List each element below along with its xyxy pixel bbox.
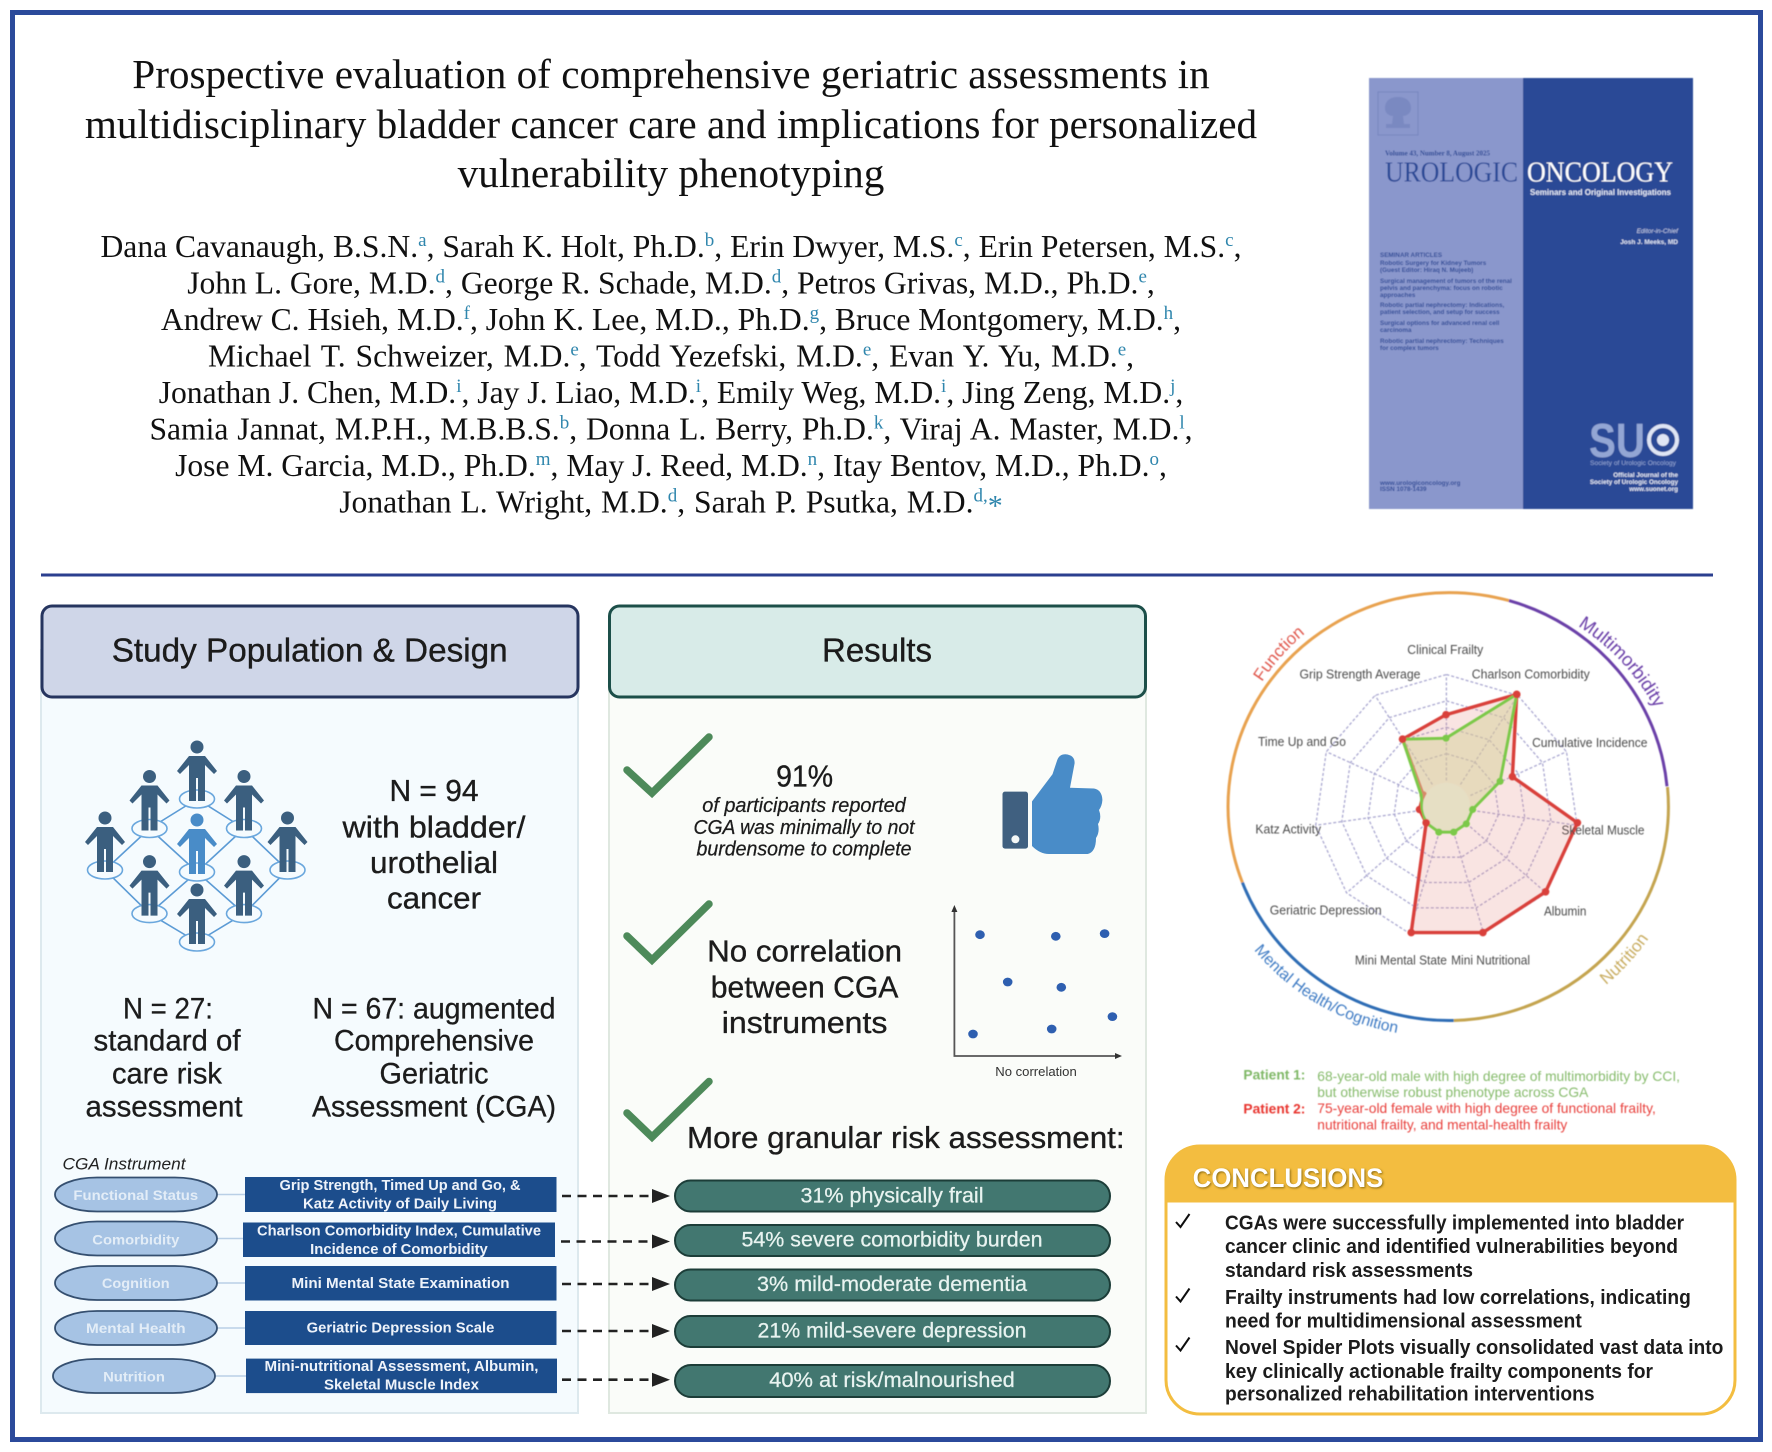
spider plot (1226, 590, 1671, 1034)
text: N = 94 (341, 773, 526, 916)
conclusion text: CGAs were successfully implemented into bladder (1225, 1212, 1684, 1234)
title (85, 51, 1258, 196)
conclusion text (1225, 1212, 1723, 1406)
journal cover: ONCOLOGY (1527, 157, 1673, 189)
authors: , Donna L. Berry, Ph.D. (569, 412, 874, 446)
CGA instrument rows: Incidence of Comorbidity (310, 1242, 488, 1258)
journal cover: carcinoma (1380, 327, 1412, 334)
journal cover: Robotic partial nephrectomy: Indications, (1380, 302, 1504, 309)
CGA instrument rows: Geriatric Depression Scale (307, 1321, 494, 1337)
axis labels: Skeletal Muscle (1562, 822, 1644, 838)
journal cover: Editor-in-Chief (1637, 228, 1679, 235)
icon: check mark 1 (627, 737, 709, 793)
axis labels: Time Up and Go (1258, 734, 1346, 749)
journal cover: Seminars and Original Investigations (1530, 187, 1671, 197)
conclusion text: cancer clinic and identified vulnerabilities beyond (1225, 1235, 1678, 1258)
conclusions header band: CONCLUSIONS (1193, 1163, 1383, 1193)
authors: , Bruce Montgomery, M.D. (819, 302, 1164, 337)
icon: patient network (85, 740, 308, 951)
authors: f (464, 303, 471, 324)
text: no correlation: between CGA (711, 970, 899, 1004)
journal cover: pelvis and parenchyma: focus on robotic (1380, 285, 1503, 292)
journal cover (1369, 78, 1693, 509)
category labels: Nutrition (1599, 934, 1648, 985)
patient legend: nutritional frailty, and mental-health frailty (1317, 1118, 1567, 1132)
result pills: 3% mild-moderate dementia (757, 1273, 1027, 1296)
authors: e (863, 340, 871, 360)
authors: j (1169, 376, 1175, 397)
CGA instrument rows: Mental Health (86, 1320, 186, 1336)
authors: i (456, 376, 461, 397)
text: no correlation: No correlation (707, 934, 902, 968)
authors: John L. Gore, M.D. (187, 266, 436, 300)
authors: Jonathan L. Wright, M.D. (339, 484, 668, 520)
title: vulnerability phenotyping (458, 150, 884, 196)
result pills: 31% physically frail (800, 1184, 984, 1208)
conclusion text: Novel Spider Plots visually consolidated vast data into (1225, 1336, 1723, 1359)
category labels: Mental Health/Cognition (1254, 943, 1398, 1034)
category ring arcs (1228, 593, 1668, 1021)
authors: m (536, 449, 551, 470)
authors: a (418, 230, 427, 251)
result pills: 40% at risk/malnourished (769, 1369, 1015, 1392)
journal cover: Robotic Surgery for Kidney Tumors (1380, 260, 1487, 267)
authors: d (668, 486, 678, 506)
conclusion text: key clinically actionable frailty components for (1225, 1360, 1653, 1383)
text: standard of care arm: standard of (94, 1024, 241, 1058)
authors: , (1147, 266, 1155, 300)
axis labels: Cumulative Incidence (1532, 735, 1648, 750)
authors: Andrew C. Hsieh, M.D. (161, 302, 464, 337)
authors: , Itay Bentov, M.D., Ph.D. (817, 448, 1149, 483)
authors: Michael T. Schweizer, M.D. (208, 338, 570, 374)
authors: , (1185, 412, 1193, 446)
axis labels (1255, 642, 1648, 967)
axis labels: Albumin (1544, 904, 1586, 918)
authors: d (772, 266, 782, 288)
text: no correlation (707, 934, 902, 1040)
authors: , (1173, 302, 1181, 337)
CGA instrument rows: Functional Status (73, 1187, 198, 1203)
journal cover: Official Journal of the (1613, 472, 1678, 479)
authors: h (1164, 303, 1174, 324)
panel: results (609, 606, 1146, 1413)
authors: b (705, 230, 714, 251)
authors: i (941, 376, 946, 397)
journal cover: UROLOGIC (1385, 157, 1518, 189)
journal cover: Volume 43, Number 8, August 2025 (1385, 150, 1490, 158)
authors: b (560, 412, 569, 434)
authors: , Todd Yezefski, M.D. (579, 338, 863, 374)
conclusion text: Frailty instruments had low correlations, indicating (1225, 1286, 1691, 1309)
text: standard of care arm (86, 992, 242, 1124)
authors: Jonathan J. Chen, M.D. (159, 375, 456, 410)
category labels: Multimorbidity (1578, 616, 1664, 706)
authors: , (1159, 448, 1167, 483)
text: N = 94: urothelial (370, 845, 498, 880)
authors: l (1179, 412, 1185, 434)
patient legend: Patient 2: (1243, 1102, 1305, 1116)
authors: g (810, 303, 820, 324)
authors: Jose M. Garcia, M.D., Ph.D. (175, 448, 536, 483)
authors: , Viraj A. Master, M.D. (883, 412, 1179, 446)
text: standard of care arm: N = 27: (123, 992, 213, 1026)
authors: , Evan Y. Yu, M.D. (871, 338, 1118, 374)
conclusion text: standard risk assessments (1225, 1259, 1473, 1282)
conclusions header band (1165, 1146, 1736, 1202)
authors: , Erin Dwyer, M.S. (714, 229, 954, 264)
journal cover: Josh J. Meeks, MD (1620, 239, 1678, 246)
patient legend: 68-year-old male with high degree of multimorbidity by CCI, (1317, 1069, 1680, 1084)
authors: e (1118, 340, 1126, 360)
authors: Dana Cavanaugh, B.S.N. (100, 229, 418, 264)
authors: , (1234, 229, 1242, 264)
CGA instrument rows: Grip Strength, Timed Up and Go, & (280, 1178, 520, 1194)
patient legend (1243, 1068, 1680, 1132)
axis labels: Grip Strength Average (1300, 666, 1420, 681)
text: more granular: More granular risk assessment: (687, 1120, 1125, 1155)
panel heading: results: Results (822, 632, 932, 670)
conclusion text: need for multidimensional assessment (1225, 1310, 1582, 1332)
authors: Samia Jannat, M.P.H., M.B.B.S. (149, 412, 560, 446)
section divider (41, 574, 1713, 576)
text: CGA arm (312, 992, 556, 1124)
authors: c (954, 230, 963, 251)
journal cover: www.suonet.org (1628, 486, 1678, 493)
authors: k (874, 412, 884, 434)
text: CGA arm: N = 67: augmented (312, 992, 556, 1026)
text: CGA arm: Assessment (CGA) (312, 1090, 556, 1124)
result pills: 54% severe comorbidity burden (742, 1228, 1042, 1252)
patient 2 polygon (red) (1399, 691, 1581, 936)
category labels: Function (1252, 628, 1305, 682)
category labels (1252, 616, 1664, 1034)
panel heading: study population: Study Population & Design (112, 632, 508, 670)
patient legend: 75-year-old female with high degree of functional frailty, (1317, 1101, 1656, 1116)
text: CGA arm: Geriatric (380, 1058, 488, 1090)
authors: , Sarah P. Psutka, M.D. (677, 484, 973, 520)
authors: , John K. Lee, M.D., Ph.D. (470, 302, 810, 337)
authors: o (1149, 449, 1159, 470)
CGA instrument rows: Comorbidity (92, 1231, 180, 1247)
authors: c (1225, 230, 1234, 251)
panel heading: results (610, 606, 1146, 697)
authors (100, 229, 1242, 522)
journal cover: Surgical management of tumors of the renal (1380, 278, 1512, 285)
title: multidisciplinary bladder cancer care and implications for personalized (85, 101, 1258, 147)
panel: conclusions (1165, 1146, 1736, 1414)
CGA instrument rows: Katz Activity of Daily Living (303, 1196, 497, 1212)
text: no correlation: instruments (722, 1005, 887, 1040)
authors: , Jay J. Liao, M.D. (461, 375, 696, 410)
authors: , (1175, 375, 1183, 410)
conclusion text: personalized rehabilitation interventions (1225, 1382, 1595, 1406)
journal cover: patient selection, and setup for success (1380, 309, 1500, 316)
text: N = 94: cancer (387, 880, 481, 916)
patient legend: but otherwise robust phenotype across CGA (1317, 1085, 1589, 1100)
journal cover: approaches (1380, 292, 1416, 299)
patient 1 polygon (green) (1399, 691, 1520, 836)
authors: n (808, 449, 818, 470)
axis labels: Clinical Frailty (1407, 642, 1484, 657)
panel: study population and design (41, 606, 578, 1413)
scatter plot: no correlation (951, 905, 1122, 1079)
authors: , May J. Reed, M.D. (551, 448, 808, 483)
patient legend: Patient 1: (1243, 1068, 1305, 1082)
panel heading: study population (42, 606, 578, 697)
title: Prospective evaluation of comprehensive geriatric assessments in (132, 51, 1210, 97)
axis labels: Geriatric Depression (1270, 902, 1382, 918)
result pills: 21% mild-severe depression (758, 1320, 1026, 1342)
authors: , (1126, 338, 1134, 374)
authors: , Emily Weg, M.D. (701, 375, 941, 410)
authors: i (696, 376, 701, 397)
text: standard of care arm: assessment (86, 1090, 242, 1124)
text: 91 percent: burdensome to complete (696, 838, 912, 860)
axis labels: Mini Nutritional (1451, 952, 1530, 967)
text: N = 94: N = 94 (390, 773, 478, 808)
authors: , George R. Schade, M.D. (445, 266, 772, 300)
text: standard of care arm: care risk (112, 1058, 222, 1090)
authors: e (1138, 266, 1147, 288)
CGA instrument rows: Charlson Comorbidity Index, Cumulative (257, 1224, 541, 1240)
icon: thumbs up (1002, 754, 1102, 854)
authors: d, (973, 486, 988, 506)
journal cover: SEMINAR ARTICLES (1380, 252, 1442, 259)
axis labels: Katz Activity (1255, 822, 1322, 836)
CGA instrument rows: Skeletal Muscle Index (324, 1378, 479, 1394)
authors: e (570, 340, 579, 360)
journal cover: ISSN 1078-1439 (1380, 486, 1427, 493)
journal cover: www.urologiconcology.org (1379, 480, 1461, 487)
authors: d (436, 266, 446, 288)
authors: , Jing Zeng, M.D. (946, 375, 1170, 410)
CGA instrument rows: Cognition (102, 1275, 170, 1291)
journal cover: Robotic partial nephrectomy: Techniques (1380, 338, 1504, 345)
label: CGA instrument: CGA Instrument (62, 1156, 187, 1174)
authors: , Erin Petersen, M.S. (963, 229, 1225, 264)
CGA instrument rows (53, 1177, 557, 1394)
result pills (675, 1180, 1110, 1397)
scatter plot: no correlation: No correlation (995, 1065, 1077, 1079)
text: N = 94: with bladder/ (341, 810, 526, 844)
journal cover: SU (1589, 415, 1645, 468)
text: 91 percent: of participants reported (702, 795, 907, 817)
radar grid (1316, 674, 1577, 933)
authors: , Petros Grivas, M.D., Ph.D. (781, 266, 1138, 300)
axis labels: Charlson Comorbidity (1472, 666, 1590, 681)
CGA instrument rows: Mini Mental State Examination (292, 1276, 510, 1292)
icon: check mark 2 (627, 904, 709, 960)
text: 91 percent: 91% (776, 758, 833, 794)
text: 91 percent (694, 758, 916, 860)
CGA instrument rows: Mini-nutritional Assessment, Albumin, (264, 1359, 538, 1375)
conclusion check marks (1176, 1214, 1190, 1350)
journal cover: Surgical options for advanced renal cell (1380, 320, 1500, 327)
icon: check mark 3 (627, 1082, 709, 1137)
dashed arrows: instruments to results (561, 1189, 670, 1387)
axis labels: Mini Mental State (1355, 952, 1447, 967)
text: CGA arm: Comprehensive (334, 1024, 534, 1058)
authors: , Sarah K. Holt, Ph.D. (427, 229, 705, 264)
journal cover: (Guest Editor: Hiraq N. Mujeeb) (1380, 267, 1473, 274)
CGA instrument rows: Nutrition (103, 1368, 165, 1384)
journal cover: Society of Urologic Oncology (1590, 461, 1676, 467)
journal cover: Society of Urologic Oncology (1590, 479, 1678, 486)
text: 91 percent: CGA was minimally to not (694, 817, 916, 839)
authors: * (988, 490, 1003, 522)
journal cover: for complex tumors (1380, 345, 1439, 352)
